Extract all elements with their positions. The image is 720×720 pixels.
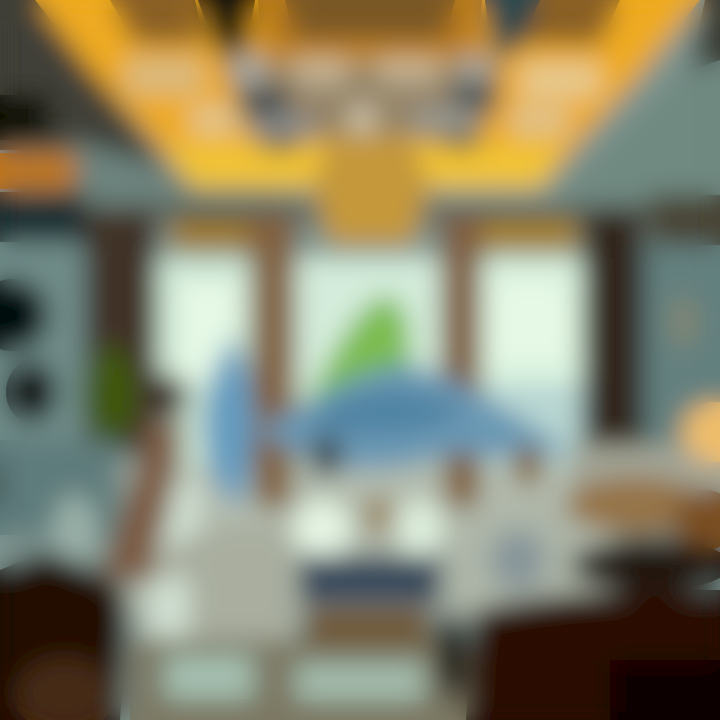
left wall (0, 192, 90, 525)
dark blobs on left wall (0, 279, 56, 513)
right wall (640, 245, 720, 460)
windows (152, 258, 582, 483)
raised arm silhouette (100, 374, 188, 585)
white armchair centre left (140, 525, 295, 640)
table with vase (294, 495, 442, 560)
icon: green plant at left (82, 345, 138, 445)
orange band at left (0, 153, 76, 189)
ceiling: central gold drop (312, 135, 430, 245)
gold band above windows (172, 220, 576, 250)
tan cushions right (565, 477, 720, 591)
fish sculpture: blue body (255, 364, 570, 469)
ceiling: pale tile grid (125, 55, 600, 151)
ceiling: golden frame (35, 0, 700, 188)
upper walls (0, 0, 720, 245)
table lamp glow at right (682, 402, 720, 462)
ceiling: dark recesses and centre gold (198, 0, 540, 55)
small dark objects under the fish (254, 434, 544, 510)
lower room base (0, 440, 720, 615)
brown sofa bottom right (466, 590, 720, 720)
floor (130, 608, 470, 720)
brown sofa bottom left (0, 552, 128, 720)
fish sculpture: blue tail (203, 335, 254, 505)
dark figure bottom centre (436, 611, 466, 699)
blue bench (298, 555, 442, 605)
fish sculpture: green fin (300, 295, 410, 412)
white armchair centre right (445, 500, 590, 620)
pillars (85, 212, 644, 497)
